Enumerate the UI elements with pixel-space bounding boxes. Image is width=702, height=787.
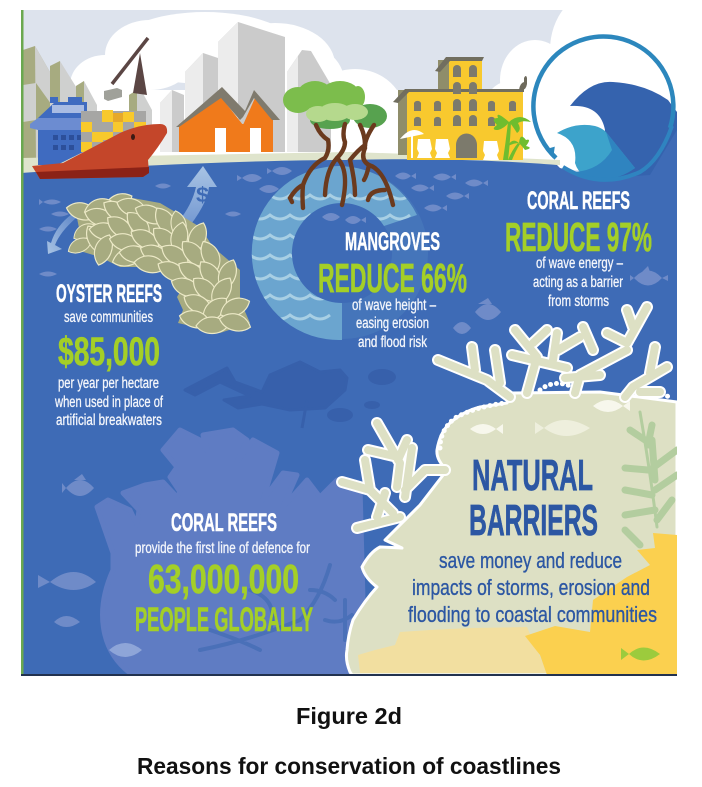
text block: oyster reefs: $85,000: [58, 330, 160, 374]
text block: natural barriers: [408, 451, 657, 627]
figure label: Figure 2d: [296, 703, 402, 729]
text block: coral reefs people: PEOPLE GLOBALLY: [135, 601, 313, 639]
text block: coral reefs wave energy: [505, 187, 652, 310]
arrow: value up with dollar: $: [196, 184, 209, 207]
pale yellow coral: [358, 627, 547, 673]
branch coral: top: [438, 307, 667, 397]
icon: cargo ship: [30, 97, 167, 179]
text block: mangroves: of wave height –: [352, 297, 436, 314]
text block: coral reefs people: [135, 509, 313, 639]
icon: pelican: [519, 76, 527, 90]
text block: coral reefs people: provide the first line of defence for: [135, 540, 310, 557]
icon: yellow hotel: [393, 57, 531, 160]
icon: beach umbrella and chairs: [400, 130, 499, 160]
text block: mangroves: and flood risk: [358, 334, 427, 351]
icon: diver silhouette: [185, 362, 347, 428]
text block: coral reefs wave energy: of wave energy –: [536, 255, 623, 272]
wave ring: [250, 166, 417, 340]
text block: coral reefs wave energy: CORAL REEFS: [527, 187, 630, 215]
branch coral: left: [342, 423, 445, 528]
city buildings: [23, 22, 331, 160]
figure caption: Reasons for conservation of coastlines: [137, 753, 561, 779]
reef scalloped edge: [440, 383, 672, 448]
text block: mangroves: MANGROVES: [345, 228, 440, 256]
green seaweed: [625, 412, 677, 545]
icon: house: [176, 87, 280, 152]
text block: mangroves: REDUCE 66%: [318, 255, 467, 301]
text block: oyster reefs: when used in place of: [54, 394, 163, 411]
dark fish: [327, 369, 396, 422]
text block: coral reefs people: CORAL REEFS: [171, 509, 277, 537]
background branch coral: [200, 565, 352, 650]
fish: [38, 167, 668, 657]
faint ring continuation: [342, 174, 428, 339]
text block: oyster reefs: OYSTER REEFS: [56, 280, 162, 308]
text block: mangroves: [318, 228, 467, 351]
icon: mangrove tree: [283, 81, 393, 208]
shore strip: [24, 152, 560, 173]
icon: palm trees: [494, 115, 531, 160]
panel border lines: [21, 10, 677, 676]
text block: coral reefs people: 63,000,000: [148, 556, 299, 602]
text block: natural barriers: save money and reduce: [439, 548, 622, 573]
sky: [24, 10, 580, 172]
text block: natural barriers: BARRIERS: [469, 496, 598, 545]
clouds: [70, 0, 700, 170]
text block: mangroves: easing erosion: [356, 315, 429, 332]
text block: oyster reefs: [54, 280, 163, 429]
text block: coral reefs wave energy: from storms: [548, 293, 609, 310]
icon: wave in circular arrow: [533, 36, 677, 180]
text block: oyster reefs: per year per hectare: [58, 375, 159, 392]
arrow: value up with dollar: [183, 166, 217, 222]
yellow coral: [525, 533, 677, 675]
arrow: value down left: [47, 214, 76, 254]
icon: oyster reef: [65, 188, 253, 334]
text block: oyster reefs: artificial breakwaters: [56, 412, 162, 429]
text block: natural barriers: NATURAL: [472, 451, 593, 500]
main pale reef: [346, 392, 677, 675]
text block: oyster reefs: save communities: [64, 309, 153, 326]
text block: coral reefs wave energy: acting as a barrier: [533, 274, 623, 291]
sea: [21, 115, 677, 675]
pale fish on reef: [470, 400, 630, 436]
background coral silhouette: [97, 430, 365, 675]
icon: green fish: [621, 648, 660, 660]
icon: crane: [104, 38, 148, 101]
